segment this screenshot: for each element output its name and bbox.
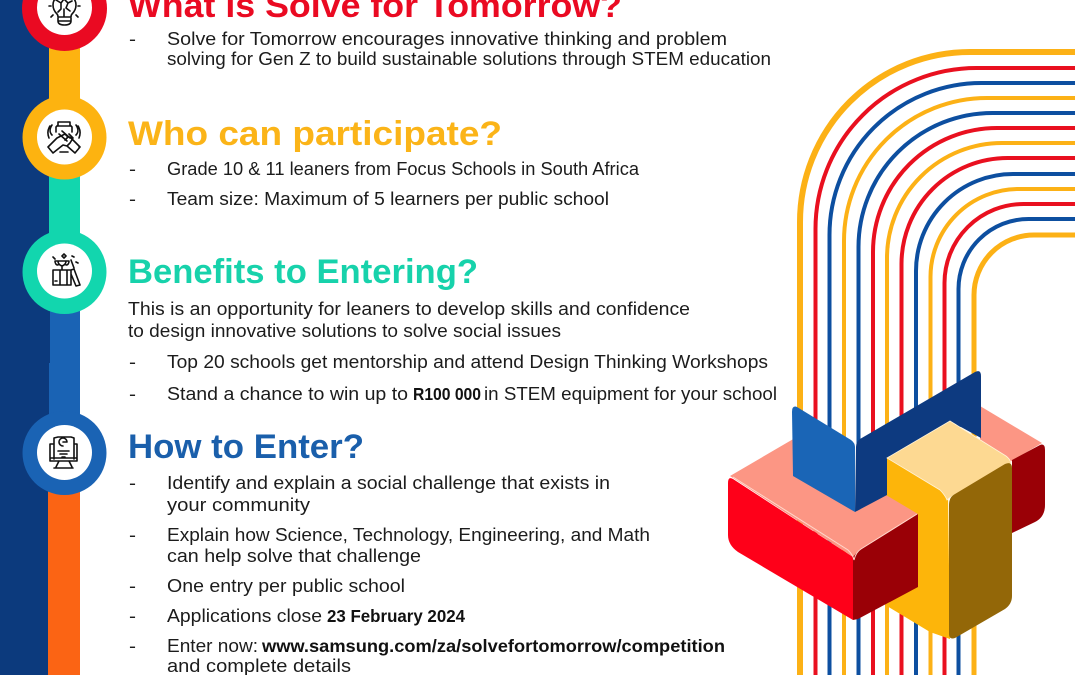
text block: benefits: -	[129, 384, 136, 404]
icon: computer screen in blue ring	[22, 411, 106, 495]
text block: who can participate: -	[129, 189, 136, 209]
text block: benefits: R100 000	[413, 384, 481, 404]
text block: how to enter	[129, 473, 725, 675]
text block: benefits: in STEM equipment for your school	[484, 384, 777, 404]
text block: how to enter: can help solve that challenge	[167, 546, 421, 566]
icon: joined hands in yellow ring	[22, 96, 106, 180]
text block: how to enter: your community	[167, 495, 310, 515]
text block: what is	[129, 29, 771, 69]
text block: benefits: This is an opportunity for leaners to develop skills and confidence	[128, 299, 690, 319]
text block: who can participate: Grade 10 & 11 leaners from Focus Schools in South Africa	[167, 159, 640, 179]
text block: how to enter: -	[129, 525, 136, 545]
text block: who can participate: -	[129, 159, 136, 179]
text block: benefits: to design innovative solutions to solve social issues	[128, 321, 561, 341]
heading: Who can participate: Who can participate?	[128, 115, 502, 153]
chart decoration: curved striped lines	[800, 52, 1075, 675]
text block: benefits: Stand a chance to win up to	[167, 384, 408, 404]
text block: how to enter: Enter now:	[167, 636, 258, 656]
text block: how to enter: Explain how Science, Technology, Engineering, and Math	[167, 525, 650, 545]
text block: how to enter: -	[129, 576, 136, 596]
text block: what is: Solve for Tomorrow encourages innovative thinking and problem	[167, 29, 727, 49]
text block: how to enter: 23 February 2024	[327, 606, 465, 626]
text block: benefits: -	[129, 352, 136, 372]
text block: how to enter: -	[129, 606, 136, 626]
heading: Benefits to Entering: Benefits to Entering?	[128, 253, 478, 291]
icon: isometric 3D blocks	[728, 371, 1045, 639]
text block: how to enter: One entry per public school	[167, 576, 405, 596]
text block: benefits: Top 20 schools get mentorship and attend Design Thinking Workshops	[167, 352, 768, 372]
icon: lightbulb in red ring	[22, 0, 107, 51]
text block: how to enter: -	[129, 636, 136, 656]
text block: what is: solving for Gen Z to build sustainable solutions through STEM education	[167, 49, 771, 69]
text block: how to enter: -	[129, 473, 136, 493]
text block: who can participate: Team size: Maximum of 5 learners per public school	[167, 189, 609, 209]
text block: what is: -	[129, 29, 136, 49]
panel: timeline column	[0, 0, 107, 675]
text block: how to enter: Identify and explain a social challenge that exists in	[167, 473, 610, 493]
text block: who can participate	[129, 159, 640, 209]
text block: how to enter: Applications close	[167, 606, 322, 626]
text block: benefits	[128, 299, 777, 404]
text block: how to enter: www.samsung.com/za/solvefortomorrow/competition	[261, 636, 725, 656]
icon: books and trophy in teal ring	[22, 230, 106, 314]
heading: How to Enter: How to Enter?	[128, 428, 364, 466]
